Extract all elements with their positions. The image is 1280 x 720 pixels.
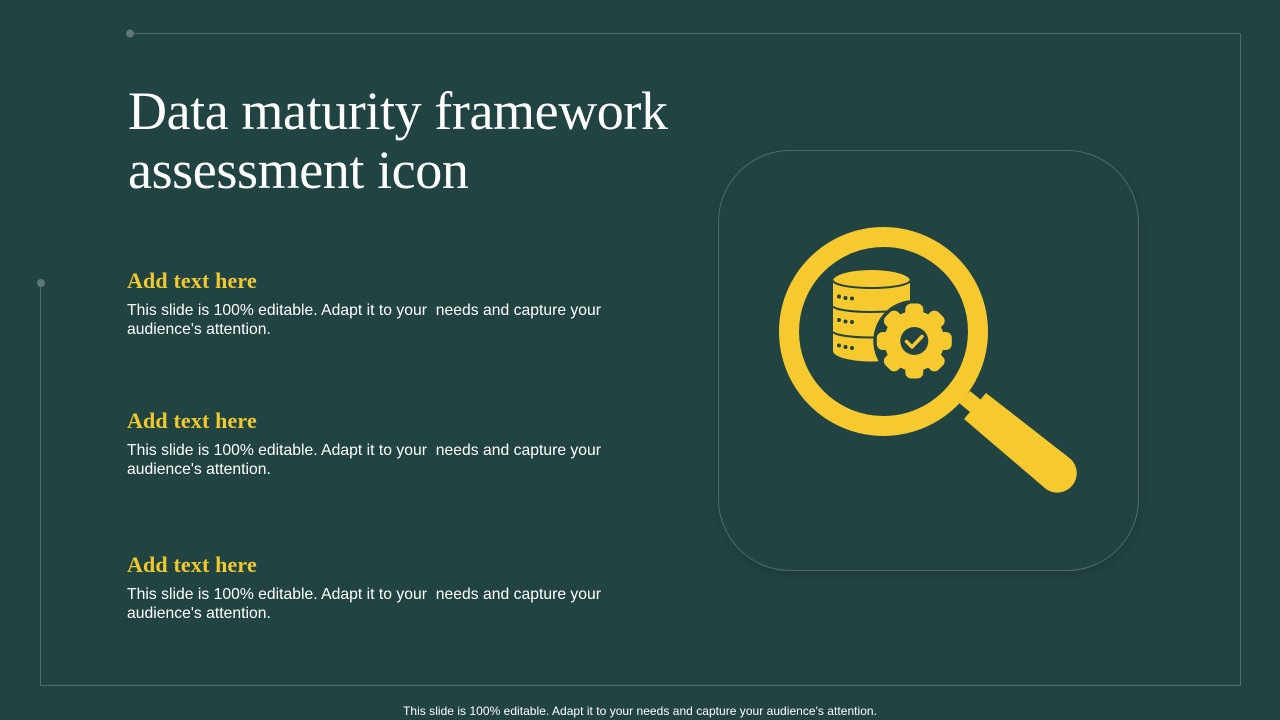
body text 3: This slide is 100% editable. Adapt it to your needs and capture your audience's attention.	[127, 586, 601, 622]
handle neck	[959, 391, 981, 412]
heading 1: Add text here	[127, 268, 257, 293]
heading 3: Add text here	[127, 552, 257, 577]
title: assessment icon	[128, 140, 468, 200]
body text 2: This slide is 100% editable. Adapt it to your needs and capture your audience's attention.	[127, 442, 601, 478]
database	[833, 270, 910, 362]
footer note: This slide is 100% editable. Adapt it to your needs and capture your audience's attention.	[403, 704, 877, 718]
body text 1: This slide is 100% editable. Adapt it to your needs and capture your audience's attention.	[127, 302, 601, 338]
text block 3	[127, 552, 601, 622]
handle	[964, 393, 1077, 493]
heading 2: Add text here	[127, 408, 257, 433]
lens ring	[789, 237, 978, 426]
text block 2	[127, 408, 601, 478]
title	[128, 81, 668, 200]
panel: icon tile	[718, 150, 1139, 571]
gear with check mark	[861, 288, 967, 394]
title: Data maturity framework	[128, 81, 668, 141]
text block 1	[127, 268, 601, 338]
